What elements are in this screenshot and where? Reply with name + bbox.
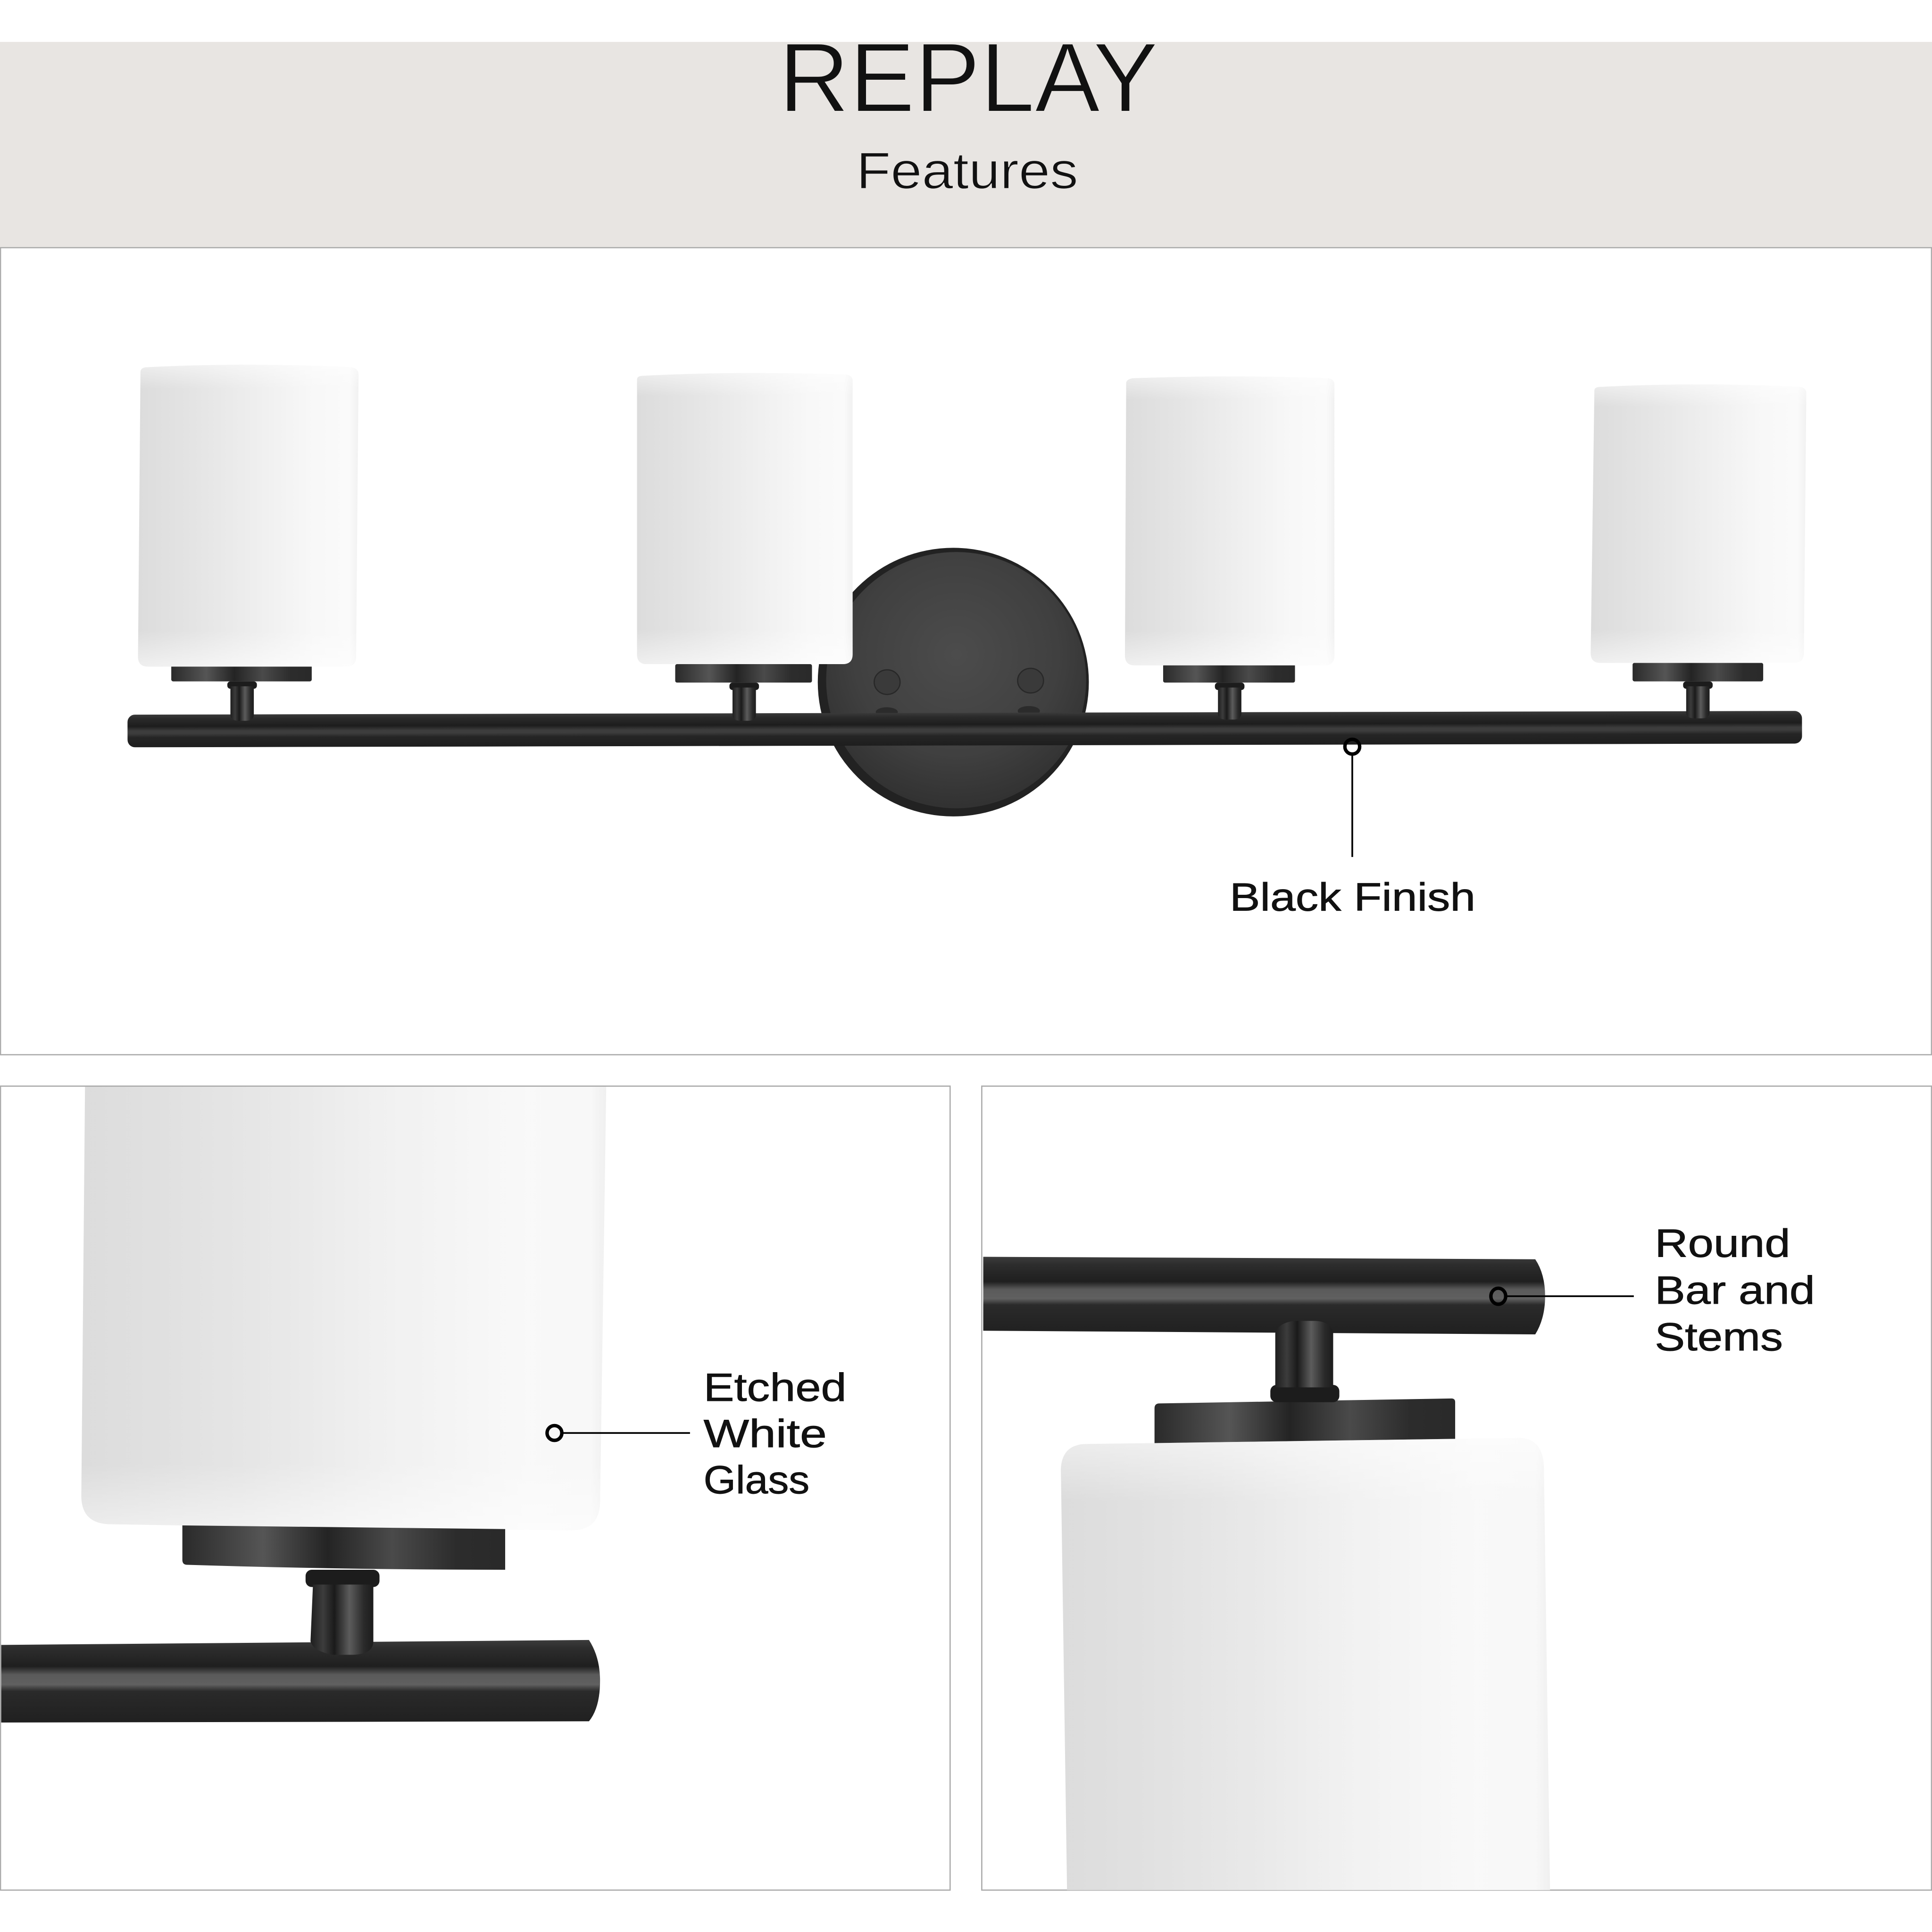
panel: etched white glass detail <box>0 1086 950 1890</box>
callout: round bar and stems: Stems <box>1655 1315 1783 1359</box>
header band <box>0 23 1932 247</box>
lamp 4: stem <box>1683 682 1713 718</box>
shade cap <box>1155 1399 1455 1444</box>
callout: round bar and stems: Round <box>1655 1221 1790 1265</box>
callout: round bar and stems: Bar and <box>1655 1268 1815 1312</box>
callout: black finish <box>1230 739 1475 919</box>
glass shade close-up <box>81 1087 606 1530</box>
lamp 1: stem <box>227 682 257 721</box>
stem <box>1270 1321 1340 1402</box>
callout: etched white glass: Etched <box>704 1365 847 1409</box>
lamp 2: cap <box>675 664 812 683</box>
glass shade 1 <box>138 365 358 666</box>
glass shade close-up <box>1061 1438 1550 1890</box>
title: REPLAY <box>779 23 1158 133</box>
callout: round bar and stems <box>1491 1221 1815 1359</box>
lamp 4: cap <box>1632 663 1763 682</box>
lamp 1: cap <box>171 663 312 682</box>
subtitle: Features <box>857 142 1078 200</box>
bar end <box>1 1640 600 1723</box>
lamp 3: cap <box>1163 664 1295 683</box>
callout: etched white glass <box>547 1365 847 1502</box>
callout: etched white glass: White <box>704 1411 827 1456</box>
glass shade 4 <box>1591 384 1807 663</box>
bar end <box>983 1257 1545 1334</box>
glass shade 3 <box>1125 376 1334 666</box>
glass shade 2 <box>637 373 853 664</box>
lamp 3: stem <box>1215 683 1244 720</box>
lamp 2: stem <box>729 683 759 721</box>
panel: round bar and stems detail <box>982 1086 1932 1890</box>
shade cap <box>183 1525 505 1570</box>
icon: wall backplate <box>818 548 1089 816</box>
stem <box>306 1570 380 1655</box>
callout: black finish: Black Finish <box>1230 874 1475 919</box>
round bar <box>127 711 1802 747</box>
callout: etched white glass: Glass <box>704 1457 809 1502</box>
panel: full fixture <box>0 248 1932 1055</box>
